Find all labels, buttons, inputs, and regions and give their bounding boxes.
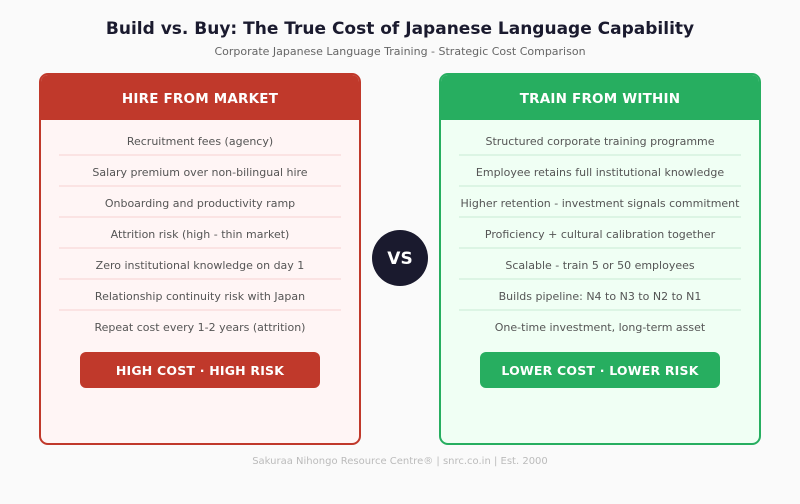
panel header: train: TRAIN FROM WITHIN bbox=[520, 91, 680, 107]
list: hire costs: Attrition risk (high - thin market) bbox=[111, 228, 289, 241]
list: hire costs: Zero institutional knowledge on day 1 bbox=[96, 259, 304, 272]
list: train benefits: Scalable - train 5 or 50 employees bbox=[505, 259, 695, 272]
list: train benefits: Employee retains full institutional knowledge bbox=[476, 166, 724, 179]
badge: lower cost bbox=[480, 352, 720, 388]
list: train benefits bbox=[459, 135, 741, 334]
footer: Sakuraa Nihongo Resource Centre® | snrc.co.in | Est. 2000 bbox=[252, 456, 548, 467]
list: hire costs: Onboarding and productivity ramp bbox=[105, 197, 295, 210]
list: train benefits: Higher retention - investment signals commitment bbox=[461, 197, 739, 210]
list: train benefits: One-time investment, long-term asset bbox=[495, 321, 705, 334]
list: hire costs: Recruitment fees (agency) bbox=[127, 135, 273, 148]
panel header: train bbox=[441, 75, 759, 120]
badge: high cost: HIGH COST · HIGH RISK bbox=[116, 363, 284, 378]
panel: train from within bbox=[439, 73, 761, 445]
panel header: hire bbox=[41, 75, 359, 120]
list: hire costs: Salary premium over non-bilingual hire bbox=[92, 166, 308, 179]
title: Build vs. Buy: The True Cost of Japanese Language Capability bbox=[106, 19, 694, 39]
subtitle: Corporate Japanese Language Training - Strategic Cost Comparison bbox=[214, 45, 586, 58]
panel header: hire: HIRE FROM MARKET bbox=[122, 91, 278, 107]
list: hire costs bbox=[59, 135, 341, 334]
list: hire costs: Relationship continuity risk with Japan bbox=[95, 290, 305, 303]
badge: high cost bbox=[80, 352, 320, 388]
icon: vs circle bbox=[372, 230, 428, 286]
panel: hire from market bbox=[39, 73, 361, 445]
icon: vs circle: VS bbox=[387, 249, 413, 269]
list: train benefits: Proficiency + cultural calibration together bbox=[485, 228, 715, 241]
list: train benefits: Builds pipeline: N4 to N3 to N2 to N1 bbox=[499, 290, 701, 303]
list: train benefits: Structured corporate training programme bbox=[485, 135, 715, 148]
badge: lower cost: LOWER COST · LOWER RISK bbox=[501, 363, 699, 378]
list: hire costs: Repeat cost every 1-2 years (attrition) bbox=[95, 321, 305, 334]
